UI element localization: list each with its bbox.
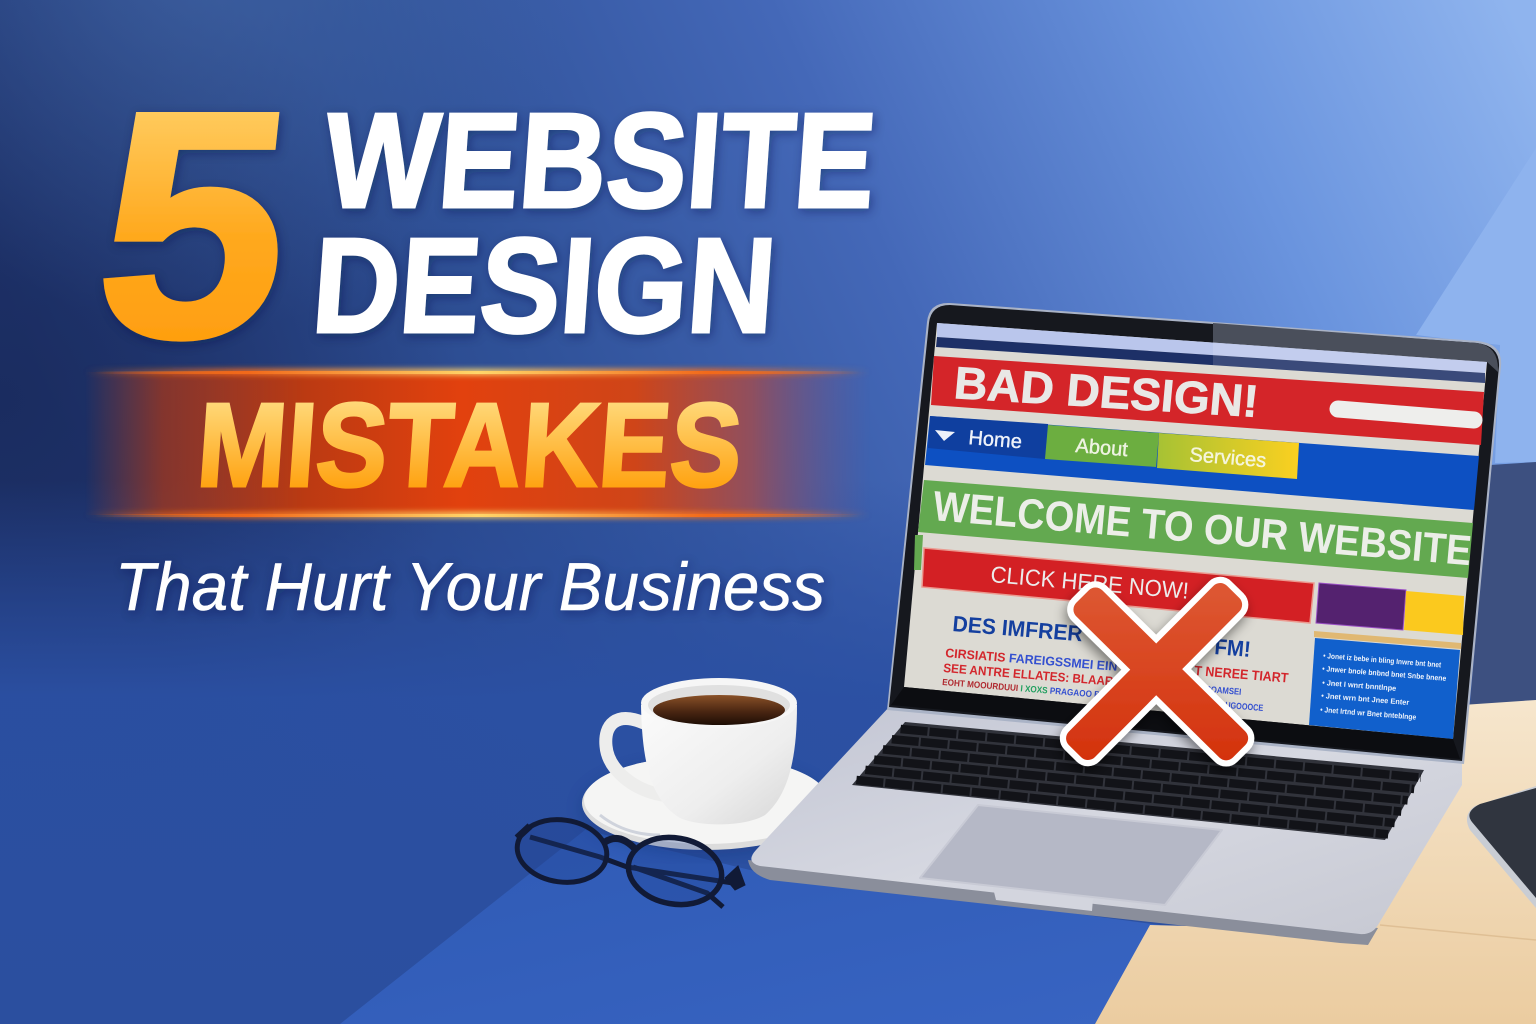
- laptop: [748, 303, 1501, 945]
- keyboard: [852, 722, 1424, 840]
- garbled body text: SEE ANTRE ELLATES: BLAAR: [943, 661, 1114, 689]
- blue sidebar box: • Jnwer bnole bnbnd bnet Snbe bnene: [1322, 664, 1447, 683]
- body headline: [952, 611, 1252, 662]
- saucer: [582, 756, 830, 854]
- coffee: [653, 695, 785, 725]
- blue sidebar box: [1309, 638, 1460, 739]
- body headline: DES IMFRER: [952, 611, 1084, 646]
- cup body: [641, 705, 797, 824]
- purple block: [1316, 583, 1406, 630]
- dark wall panel right: [1470, 462, 1536, 705]
- nav item: home: Home: [968, 427, 1023, 453]
- lighter floor diagonal: [340, 830, 1160, 1024]
- subtitle: That Hurt Your Business: [115, 549, 825, 625]
- coffee cup: [606, 678, 797, 824]
- click here banner: [922, 548, 1314, 623]
- navigation bar: [925, 416, 1479, 510]
- garbled body text: ROAMSEI: [1205, 684, 1242, 697]
- cup handle: [606, 719, 662, 795]
- wooden desk: [1095, 700, 1536, 1024]
- nav item: services: [1157, 433, 1299, 479]
- header text: BAD DESIGN!: [952, 357, 1261, 427]
- browser top strips: [937, 323, 1487, 373]
- title: 5 website design: [83, 46, 881, 405]
- garbled body text: [942, 646, 1290, 713]
- nav item: home: [928, 416, 1048, 459]
- nav item: about: About: [1075, 435, 1129, 461]
- mistakes banner: [85, 369, 870, 518]
- green welcome banner: WELCOME TO OUR WEBSITE: [931, 482, 1473, 574]
- website on screen: [904, 323, 1487, 739]
- garbled body text: UGOOOCE: [1225, 700, 1264, 713]
- body headline: FM!: [1214, 634, 1252, 662]
- search bar: [1338, 409, 1474, 420]
- red X mark: [1076, 593, 1239, 751]
- big number 5: 5: [83, 46, 307, 405]
- nav item: about: [1045, 425, 1159, 467]
- blue sidebar box: • Jnet I wnrt bnntlnpe: [1322, 678, 1397, 693]
- blue sidebar box: • Jonet iz bebe in bling Inwre bnt bnet: [1323, 651, 1442, 669]
- tablet on desk: [1467, 786, 1536, 908]
- dark bezel bottom edge: [891, 687, 1460, 759]
- light diagonal panel top right: [1416, 148, 1536, 463]
- blue sidebar box: • Jnet Irtnd wr Bnet bnteblnge: [1320, 705, 1417, 722]
- trackpad: [920, 805, 1222, 905]
- nav item: services: Services: [1189, 444, 1267, 472]
- garbled body text: CIRSIATIS FAREIGSSMEI EIN: [945, 646, 1118, 674]
- yellow block: [1404, 591, 1464, 635]
- glasses: [513, 814, 745, 912]
- garbled body text: T NEREE TIART: [1194, 663, 1290, 686]
- blue sidebar box: • Jnet wrn bnt Jnee Enter: [1321, 691, 1410, 707]
- red header bar: [931, 356, 1484, 445]
- banner word: MISTAKES: MISTAKES: [193, 379, 746, 512]
- laptop base: [748, 706, 1462, 945]
- laptop lid: [887, 303, 1501, 764]
- heading word: WEBSITE: WEBSITE: [320, 85, 881, 236]
- screen base: [904, 323, 1487, 739]
- click here banner: CLICK HERE NOW!: [990, 561, 1190, 604]
- garbled body text: EOHT MOOURDUUI I XOXS PRAGAOO BOU: [942, 677, 1113, 701]
- cup rim: [641, 678, 797, 728]
- tan strip: [1314, 631, 1461, 649]
- heading word: DESIGN: DESIGN: [308, 210, 781, 361]
